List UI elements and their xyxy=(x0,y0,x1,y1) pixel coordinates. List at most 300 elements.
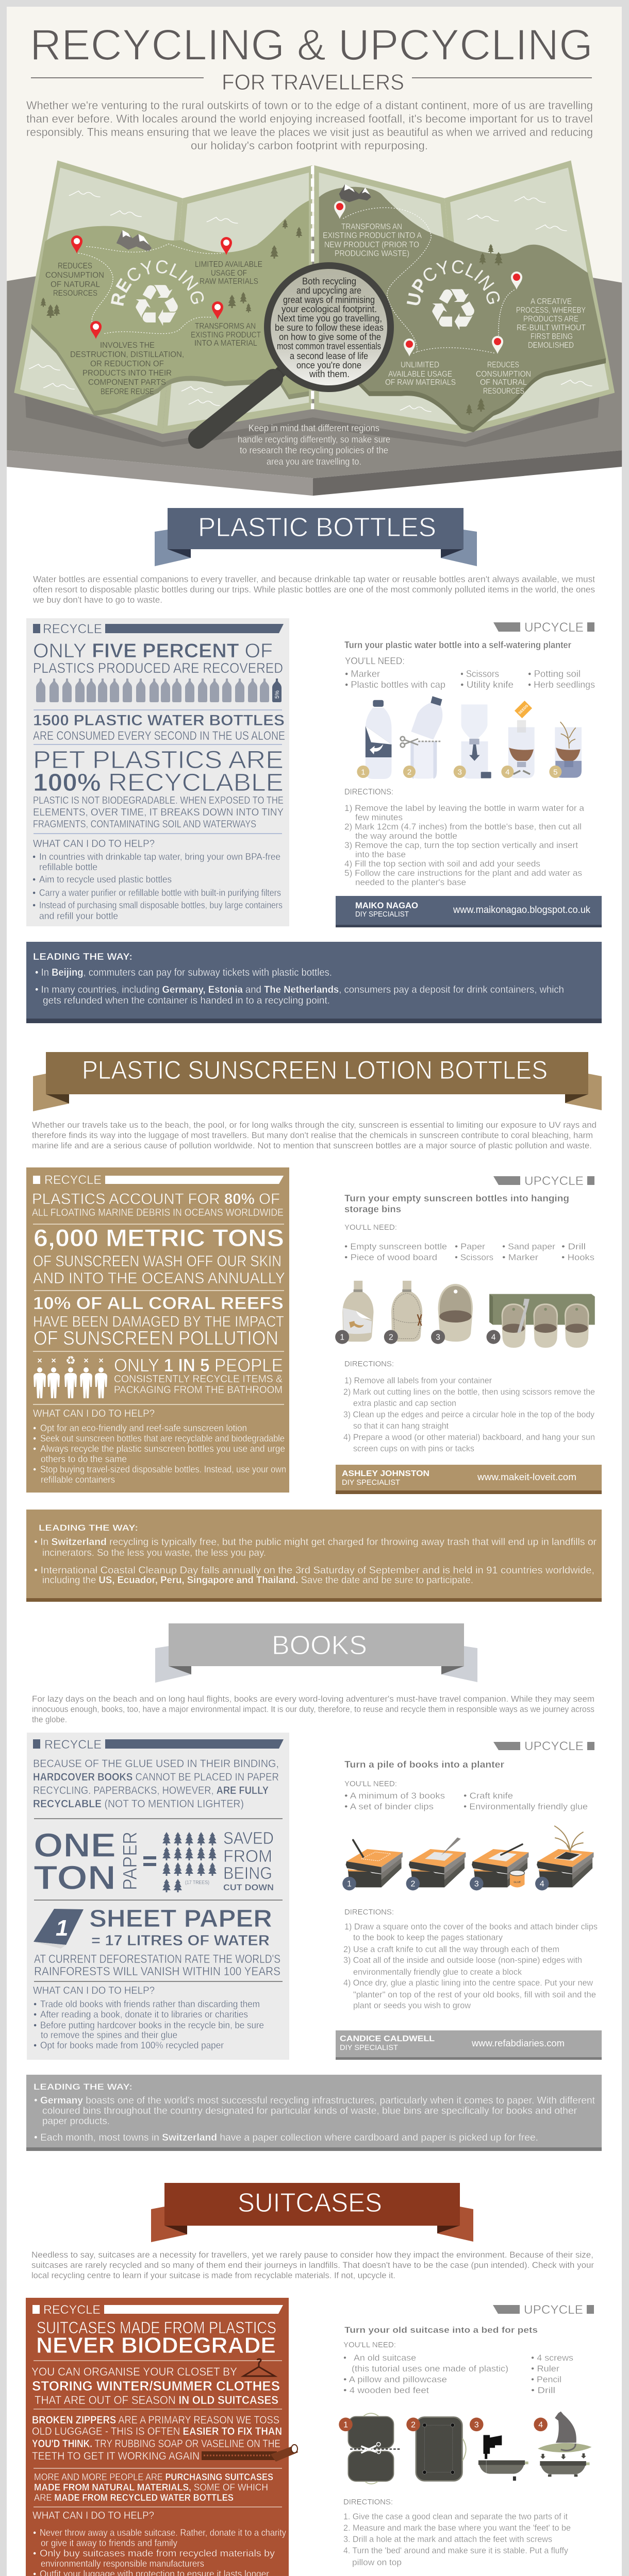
note on table: Keep in mind that different regions xyxy=(249,423,379,433)
materials: • A set of binder clips xyxy=(344,1802,434,1811)
directions: 4. Turn the 'bed' around and make sure it is stable. Put a fluffy xyxy=(343,2546,568,2555)
what can I do: WHAT CAN I DO TO HELP? xyxy=(33,1985,155,1996)
what can I do: • xyxy=(33,1464,36,1475)
icon: upcycling emblem: ♻ xyxy=(427,277,479,344)
map labels: upcycling: AVAILABLE USAGE xyxy=(388,370,452,379)
suitcases intro: Needless to say, suitcases are a necessity for travellers, yet we rarely pause to consider how they impact the environment. Because of their size, xyxy=(31,2250,593,2260)
stat: one in five: ONLY 1 IN 5 PEOPLE xyxy=(114,1355,283,1376)
suitcases intro xyxy=(31,2250,594,2280)
what can I do: to remove the spines and their glue xyxy=(41,2030,177,2040)
what can I do: • xyxy=(32,900,36,910)
storing clothes text xyxy=(31,2359,280,2406)
icon: recycling emblem: RECYCLING xyxy=(110,260,204,306)
steps illustration: suitcase pet bed: 3 xyxy=(474,2420,479,2429)
directions: 2) Mark 12cm (4.7 inches) from the bottle's base, then cut all xyxy=(344,822,582,832)
stat: never biodegrade: NEVER BIODEGRADE xyxy=(36,2333,276,2358)
map pins: recycling xyxy=(71,235,232,339)
recycle header: RECYCLE xyxy=(44,1738,102,1752)
upcycle header: UPCYCLE xyxy=(524,1739,584,1753)
map labels: recycling: BEFORE REUSE xyxy=(101,387,154,396)
map labels: recycling: RESOURCES xyxy=(53,289,97,298)
materials: • A pillow and pillowcase xyxy=(343,2375,447,2384)
recycle header xyxy=(33,1738,284,1752)
steps illustration: book planter: 4 xyxy=(540,1880,544,1889)
stat: five percent xyxy=(33,640,283,676)
directions: 4) Fill the top section with soil and add your seeds xyxy=(344,859,540,869)
stat: PET plastics: FRAGMENTS, CONTAMINATING SOIL AND WATERWAYS xyxy=(33,819,256,830)
what can I do: In countries with drinkable tap water, bring your own BPA-free xyxy=(39,852,280,862)
directions: 2. Measure and mark the base where you want the 'feet' to be xyxy=(343,2523,571,2533)
map labels: upcycling: RESOURCES xyxy=(483,387,524,396)
intro text: than ever before. With locales around the world enjoying increased footfall, it's become important for us to travel xyxy=(26,112,593,125)
what can I do: • xyxy=(34,2040,37,2050)
what can I do: refillable containers xyxy=(41,1475,115,1485)
stat: one in five: CONSISTENTLY RECYCLE ITEMS & xyxy=(114,1374,283,1385)
materials: • Pencil xyxy=(531,2375,561,2384)
what can I do: WHAT CAN I DO TO HELP? xyxy=(32,2510,154,2521)
materials: • Craft knife xyxy=(464,1791,513,1801)
stat: metric tons: 6,000 METRIC TONS xyxy=(34,1224,284,1251)
map labels: recycling: USAGE OF xyxy=(211,269,247,278)
leading the way: sunscreen: • In Switzerland recycling is typically free, but the public might get charged for throwing away trash that will end up in landfills or xyxy=(34,1537,597,1548)
leading the way: books: LEADING THE WAY: xyxy=(34,2082,133,2092)
stat: one ton of paper: BEING xyxy=(223,1863,272,1883)
what can I do: Opt for books made from 100% recycled paper xyxy=(40,2040,224,2050)
credit: Candice Caldwell: CANDICE CALDWELL xyxy=(340,2035,435,2043)
credit: Ashley Johnston: ASHLEY JOHNSTON xyxy=(342,1469,429,1478)
map labels: upcycling: A CREATIVE xyxy=(531,297,572,306)
stat: metric tons: AND INTO THE OCEANS ANNUALLY xyxy=(33,1269,285,1287)
hardcover text xyxy=(33,1758,279,1810)
banner: suitcases: SUITCASES xyxy=(238,2188,382,2218)
steps illustration: sunscreen storage xyxy=(335,1281,595,1348)
map labels: upcycling xyxy=(323,223,586,396)
zipper text: BROKEN ZIPPERS ARE A PRIMARY REASON WE TOSS xyxy=(32,2414,279,2426)
upcycle header: UPCYCLE xyxy=(524,620,584,635)
intro text: responsibly. This means ensuring that we leave the places we visit just as beautiful as when we arrived and reducing xyxy=(26,126,593,139)
hardcover text: BECAUSE OF THE GLUE USED IN THEIR BINDING, xyxy=(33,1758,279,1770)
sunscreen intro: marine life and are a serious cause of pollution worldwide. Not to mention that sunscreen bottles are a major source of plastic pollution and waste. xyxy=(32,1141,592,1150)
storing clothes text: STORING WINTER/SUMMER CLOTHES xyxy=(32,2378,280,2394)
stat: 1500 bottles xyxy=(33,712,285,743)
steps illustration: suitcase pet bed xyxy=(339,2412,592,2484)
materials: YOU'LL NEED: xyxy=(344,1780,397,1788)
what can I do: • xyxy=(34,2020,37,2030)
title: RECYCLING & UPCYCLING xyxy=(30,21,593,69)
what can I do: • xyxy=(33,2528,36,2538)
directions: 3. Drill a hole at the mark and attach the feet with screws xyxy=(343,2534,552,2544)
credit: Ashley Johnston xyxy=(336,1465,602,1494)
directions: to the book to keep the pages stationary xyxy=(353,1933,503,1942)
map labels: recycling xyxy=(45,260,262,396)
icon: people row: × xyxy=(98,1357,104,1365)
note on table: area you are travelling to. xyxy=(267,456,361,467)
materials xyxy=(344,1759,588,1811)
stat: PET plastics: PLASTIC IS NOT BIODEGRADABLE. WHEN EXPOSED TO THE xyxy=(33,795,284,806)
upcycle header: UPCYCLE xyxy=(524,1174,584,1188)
materials: • Marker xyxy=(345,669,380,679)
stat: one sheet of paper: SHEET PAPER xyxy=(89,1905,272,1933)
note on table: to research the recycling policies of the xyxy=(240,445,388,455)
leading the way: sunscreen: including the US, Ecuador, Peru, Singapore and Thailand. Save the date and be sure to participate. xyxy=(42,1575,473,1586)
steps illustration: bottle planter: 1 xyxy=(361,768,366,776)
stat: one sheet of paper xyxy=(34,1905,280,1978)
what can I do: • xyxy=(33,2548,36,2558)
icon: people row: × xyxy=(37,1357,42,1365)
map pins: upcycling xyxy=(334,201,522,357)
what can I do: • xyxy=(33,1433,36,1444)
magnifier text: great ways of minimising xyxy=(283,295,375,305)
recycle header xyxy=(33,622,284,636)
natural materials text: ARE MADE FROM RECYCLED WATER BOTTLES xyxy=(34,2493,234,2503)
stat: marine debris: ALL FLOATING MARINE DEBRIS IN OCEANS WORLDWIDE xyxy=(32,1207,284,1218)
materials: YOU'LL NEED: xyxy=(343,2341,396,2349)
what can I do: After reading a book, donate it to libraries or charities xyxy=(40,2009,248,2020)
stat: one ton of paper: SAVED xyxy=(223,1828,274,1848)
map labels: recycling: CONSUMPTION xyxy=(45,271,104,280)
intro text xyxy=(26,99,593,152)
intro text: Whether we're venturing to the rural outskirts of town or to the edge of a distant continent, more of us are travelling xyxy=(26,99,593,112)
magnifier text xyxy=(275,276,384,379)
directions: "planter" on top of the rest of your old books, fill with soil and the xyxy=(353,1990,596,1999)
stat: 1500 bottles: 1500 PLASTIC WATER BOTTLES xyxy=(33,712,285,729)
steps illustration: sunscreen storage: 1 xyxy=(340,1333,344,1342)
leading the way: plastic bottles: LEADING THE WAY: xyxy=(33,952,133,962)
stat: metric tons xyxy=(33,1224,285,1287)
magnifier text: on how to give some of the xyxy=(279,332,381,342)
directions: 1) Remove all labels from your container xyxy=(344,1376,492,1385)
what can I do: Carry a water purifier or refillable bottle with built-in purifying filters xyxy=(39,888,281,898)
directions: DIRECTIONS: xyxy=(344,1908,394,1917)
what can I do: and refill your bottle xyxy=(39,911,118,921)
stat: one sheet of paper: AT CURRENT DEFORESTATION RATE THE WORLD'S xyxy=(34,1952,280,1965)
stat: 1500 bottles: ARE CONSUMED EVERY SECOND IN THE US ALONE xyxy=(33,729,285,743)
what can I do: Never throw away a usable suitcase. Rather, donate it to a charity xyxy=(40,2528,286,2538)
what can I do xyxy=(33,1408,286,1485)
banner: sunscreen xyxy=(33,1052,602,1111)
hardcover text: HARDCOVER BOOKS CANNOT BE PLACED IN PAPER xyxy=(33,1771,279,1783)
directions: screen cups on with pins or tacks xyxy=(353,1444,474,1453)
icon: recycling emblem xyxy=(110,260,204,340)
note on table xyxy=(238,423,390,467)
what can I do: Instead of purchasing small disposable bottles, buy large containers xyxy=(39,900,283,910)
map labels: recycling: REDUCES xyxy=(58,262,92,270)
directions: 4) Prepare a wood (or other material) backboard, and hang your sun xyxy=(343,1432,595,1442)
stat: one ton of paper: ONE xyxy=(34,1826,116,1864)
directions: 1) Remove the label by leaving the bottle in warm water for a xyxy=(344,803,585,813)
materials: • Utility knife xyxy=(460,680,514,690)
materials: Turn a pile of books into a planter xyxy=(344,1759,504,1770)
steps illustration: suitcase pet bed: 2 xyxy=(411,2420,416,2429)
icon: upcycling emblem xyxy=(406,260,500,344)
leading the way: books: • Germany boasts one of the world's most successful recycling infrastructures, particularly when it comes to paper. With different xyxy=(34,2095,595,2106)
upcycle header xyxy=(493,2303,594,2317)
what can I do: • xyxy=(34,1999,37,2009)
materials: • Piece of wood board xyxy=(344,1252,437,1262)
materials xyxy=(344,640,595,690)
directions: plant or seeds you wish to grow xyxy=(353,2001,471,2010)
books intro xyxy=(32,1694,594,1724)
stat: one ton of paper: FROM xyxy=(223,1846,272,1866)
directions: 2) Use a craft knife to cut all the way through each of them xyxy=(343,1944,559,1954)
directions: needed to the planter's base xyxy=(355,877,466,887)
table under the map xyxy=(7,230,622,496)
what can I do xyxy=(32,838,283,921)
materials: • 4 wooden bed feet xyxy=(343,2385,429,2395)
steps illustration: sunscreen storage: 2 xyxy=(389,1333,393,1342)
stat: coral reefs: 10% OF ALL CORAL REEFS xyxy=(33,1294,284,1313)
storing clothes text: THAT ARE OUT OF SEASON IN OLD SUITCASES xyxy=(35,2394,278,2406)
banner: sunscreen: PLASTIC SUNSCREEN LOTION BOTTLES xyxy=(82,1056,548,1084)
materials: • Paper xyxy=(455,1242,485,1251)
stat: coral reefs: OF SUNSCREEN POLLUTION xyxy=(34,1328,278,1349)
what can I do: Aim to recycle used plastic bottles xyxy=(39,874,172,885)
materials: Turn your plastic water bottle into a self-watering planter xyxy=(344,640,571,650)
what can I do: others to do the same xyxy=(41,1454,127,1464)
leading the way: sunscreen: LEADING THE WAY: xyxy=(39,1523,138,1533)
materials: • Marker xyxy=(502,1252,538,1262)
map labels: recycling: EXISTING PRODUCT xyxy=(191,331,261,340)
stat: five percent: ONLY FIVE PERCENT OF xyxy=(33,640,273,662)
magnifier text: be sure to follow these ideas xyxy=(275,323,384,333)
stat: coral reefs: HAVE BEEN DAMAGED BY THE IMPACT xyxy=(33,1313,284,1330)
stat: never biodegrade: SUITCASES MADE FROM PLASTICS xyxy=(37,2318,276,2337)
panel: upcycle suitcases xyxy=(335,2303,601,2576)
sunscreen intro: Whether our travels take us to the beach, the pool, or for long walks through the city, sunscreen is essential to limiting our exposure to UV rays and xyxy=(32,1121,597,1130)
leading the way: plastic bottles: gets refunded when the container is handed in to a recycling point. xyxy=(43,995,330,1006)
credit: Maiko Nagao: MAIKO NAGAO xyxy=(355,901,418,910)
directions: 3) Clean up the edges and peirce a circular hole in the top of the body xyxy=(343,1410,594,1419)
leading the way: sunscreen xyxy=(26,1510,602,1602)
stat: metric tons: OF SUNSCREEN WASH OFF OUR SKIN xyxy=(33,1252,282,1270)
materials: • Scissors xyxy=(460,669,499,679)
books intro: For lazy days on the beach and on long haul flights, books are every word-loving adventurer's must-have travel companion. While they may seem xyxy=(32,1694,594,1704)
stat: one ton of paper: (17 TREES) xyxy=(185,1880,209,1886)
stat: five percent: PLASTICS PRODUCED ARE RECOVERED xyxy=(33,660,283,676)
steps illustration: suitcase pet bed: 1 xyxy=(343,2420,348,2429)
what can I do: WHAT CAN I DO TO HELP? xyxy=(33,1408,155,1419)
directions: DIRECTIONS: xyxy=(343,2498,393,2506)
materials: • Environmentally friendly glue xyxy=(464,1802,588,1811)
zipper text: TEETH TO GET IT WORKING AGAIN xyxy=(32,2450,200,2462)
materials: • Drill xyxy=(531,2385,555,2395)
directions xyxy=(344,788,585,887)
upcycle header xyxy=(493,1739,594,1753)
steps illustration: book planter: 3 xyxy=(474,1880,479,1889)
steps illustration: book planter: GLUE xyxy=(514,1880,521,1884)
stat: PET plastics: 100% RECYCLABLE xyxy=(33,769,284,796)
stat: marine debris xyxy=(32,1191,284,1218)
magnifier text: a second lease of life xyxy=(290,351,368,361)
what can I do: • xyxy=(32,888,36,898)
directions: few minutes xyxy=(355,812,403,822)
directions: so that it can hang straight xyxy=(353,1421,449,1431)
plastic bottles intro: we buy don't have to go to waste. xyxy=(32,595,162,605)
leading the way: plastic bottles: • In Beijing, commuters can pay for subway tickets with plastic bottles. xyxy=(35,967,332,978)
stat: one sheet of paper: RAINFORESTS WILL VANISH WITHIN 100 YEARS xyxy=(34,1964,280,1978)
map labels: upcycling: PRODUCING WASTE) xyxy=(335,249,409,258)
books intro: the globe. xyxy=(32,1715,67,1724)
map labels: recycling: LIMITED AVAILABLE xyxy=(195,260,262,269)
what can I do: Always recycle the plastic sunscreen bottles you use and urge xyxy=(40,1444,285,1454)
credit: Candice Caldwell xyxy=(336,2030,602,2060)
recycle header: RECYCLE xyxy=(43,2303,101,2317)
directions xyxy=(343,1360,595,1453)
natural materials text xyxy=(34,2472,273,2503)
what can I do: • xyxy=(33,1423,36,1433)
stat: PET plastics: PET PLASTICS ARE xyxy=(33,747,284,774)
materials: • Empty sunscreen bottle xyxy=(344,1242,447,1251)
directions: DIRECTIONS: xyxy=(344,788,393,796)
materials: YOU'LL NEED: xyxy=(345,656,405,666)
stat: one ton of paper: PAPER xyxy=(120,1832,141,1890)
steps illustration: bottle planter: 2 xyxy=(407,768,411,776)
what can I do: environmentally responsible manufacturers xyxy=(41,2558,204,2569)
natural materials text: MADE FROM NATURAL MATERIALS, SOME OF WHICH xyxy=(34,2482,268,2493)
steps illustration: book planter: 1 xyxy=(347,1880,352,1889)
materials: • Potting soil xyxy=(528,669,581,679)
what can I do xyxy=(33,1985,264,2050)
magnifier text: with them. xyxy=(309,369,350,379)
recycle header xyxy=(32,2303,283,2317)
banner: plastic bottles xyxy=(155,508,477,566)
steps illustration: sunscreen storage: 4 xyxy=(491,1333,496,1342)
map labels: upcycling: PRODUCTS ARE xyxy=(523,315,578,324)
upcycle header xyxy=(493,620,594,635)
panel: upcycle plastic bottles xyxy=(336,620,602,927)
map labels: upcycling: NEW PRODUCT (PRIOR TO xyxy=(324,241,419,249)
suitcases intro: local recycling centre to learn if your suitcase is made from recyclable materials. If not, upcycle it. xyxy=(31,2271,395,2280)
directions: 3) Coat all of the inside and outside loose (non-spine) edges with xyxy=(343,1955,582,1965)
map labels: recycling: COMPONENT PARTS xyxy=(88,378,166,387)
map labels: recycling: DESTRUCTION, DISTILLATION, xyxy=(70,350,184,359)
materials: (this tutorial uses one made of plastic) xyxy=(352,2364,508,2374)
banner: books xyxy=(155,1623,477,1683)
steps illustration: book planter xyxy=(342,1826,593,1890)
stat: one in five: PACKAGING FROM THE BATHROOM xyxy=(114,1384,283,1396)
zipper text: YOU'D THINK. TRY RUBBING SOAP OR VASELINE ON THE xyxy=(32,2438,280,2450)
hardcover text: RECYCLING. PAPERBACKS, HOWEVER, ARE FULLY xyxy=(33,1785,269,1797)
map labels: recycling: INTO A MATERIAL xyxy=(194,339,257,348)
stat: one sheet of paper: 1 xyxy=(56,1916,68,1941)
materials: Turn your old suitcase into a bed for pets xyxy=(344,2325,538,2335)
credit: Ashley Johnston: DIY SPECIALIST xyxy=(342,1478,400,1487)
icon: people row xyxy=(34,1354,107,1398)
map labels: upcycling: FIRST BEING xyxy=(531,332,573,341)
note on table: handle recycling differently, so make sure xyxy=(238,434,390,445)
map labels: recycling: PRODUCTS INTO THEIR xyxy=(82,369,172,378)
icon: trees xyxy=(162,1832,217,1892)
credit: Maiko Nagao: DIY SPECIALIST xyxy=(355,910,409,919)
map labels: upcycling: CONSUMPTION xyxy=(476,370,531,379)
map labels: upcycling: UNLIMITED xyxy=(401,361,439,369)
materials: storage bins xyxy=(344,1204,401,1214)
steps illustration: bottle planter: 3 xyxy=(458,768,462,776)
what can I do: Trade old books with friends rather than discarding them xyxy=(40,1999,260,2009)
plastic bottles intro: often resort to disposable plastic bottles during our trips. While plastic bottles are one of the most commonly polluted items in the world, the ones xyxy=(33,584,595,595)
directions: 5) Follow the care instructions for the plant and add water as xyxy=(344,868,582,878)
panel: recycle books xyxy=(27,1733,289,2060)
magnifier text: once you're done xyxy=(296,360,361,370)
map labels: upcycling: PROCESS, WHEREBY xyxy=(516,306,586,315)
zipper text xyxy=(32,2414,298,2462)
directions: 2) Mark out cutting lines on the bottle, then using scissors remove the xyxy=(343,1387,595,1397)
magnifying glass xyxy=(198,262,394,439)
leading the way: books: coloured bins throughout the country designated for particular kinds of waste, blue bins are specifically for books and other xyxy=(42,2106,577,2116)
icon: zipper xyxy=(202,2445,298,2462)
stat: PET plastics: ELEMENTS, OVER TIME, IT BREAKS DOWN INTO TINY xyxy=(33,807,284,818)
sunscreen intro: therefore finds its way into the luggage of most travellers. But many don't realise that the chemicals in sunscreen contribute to coral bleaching, harm xyxy=(32,1131,593,1140)
stat: one ton of paper: TON xyxy=(34,1858,116,1896)
suitcases intro: suitcases are rarely recycled and so many of them end their journeys in landfills. That doesn't have to be the case (pun intended). Check with your xyxy=(31,2261,594,2270)
magnifier text: most common travel essentials xyxy=(277,341,381,351)
sunscreen intro xyxy=(32,1121,597,1150)
leading the way: sunscreen: • International Coastal Cleanup Day falls annually on the 3rd Saturday of September and is held in 91 countries worldwide, xyxy=(34,1565,594,1576)
what can I do: Before putting hardcover books in the recycle bin, be sure xyxy=(40,2020,264,2030)
directions: DIRECTIONS: xyxy=(344,1360,394,1368)
steps illustration: bottle planter: SEEDS xyxy=(518,704,529,715)
bottle row: 5% xyxy=(274,690,280,699)
steps illustration: bottle planter: 4 xyxy=(505,768,510,776)
directions: the way around the bottle xyxy=(355,831,457,841)
directions: 3) Remove the cap, turn the top section vertically and insert xyxy=(344,840,578,850)
stat: one sheet of paper: = 17 LITRES OF WATER xyxy=(91,1933,270,1949)
what can I do xyxy=(32,2510,286,2576)
materials: • A minimum of 3 books xyxy=(344,1791,445,1801)
map labels: recycling: RAW MATERIALS xyxy=(200,277,258,286)
what can I do: • xyxy=(32,852,36,862)
materials: An old suitcase xyxy=(354,2353,416,2363)
directions: into the base xyxy=(355,850,406,859)
directions: 1. Give the case a good clean and separate the two parts of it xyxy=(343,2512,568,2521)
subtitle: FOR TRAVELLERS xyxy=(222,70,404,95)
stat: one in five xyxy=(114,1355,283,1396)
banner: books: BOOKS xyxy=(272,1631,367,1660)
map labels: upcycling: TRANSFORMS AN xyxy=(341,223,402,231)
banner: plastic bottles: PLASTIC BOTTLES xyxy=(198,513,436,543)
icon: recycling emblem: ♻ xyxy=(131,273,183,340)
icon: people row: × xyxy=(51,1357,56,1365)
credit: Candice Caldwell: www.refabdiaries.com xyxy=(471,2038,565,2048)
intro text: our holiday's carbon footprint with repurposing. xyxy=(191,139,428,152)
materials: YOU'LL NEED: xyxy=(344,1223,397,1232)
panel: upcycle sunscreen xyxy=(335,1174,602,1494)
hardcover text: RECYCLABLE (NOT TO MENTION LIGHTER) xyxy=(33,1798,244,1810)
magnifier text: Both recycling xyxy=(302,276,356,286)
leading the way: books xyxy=(26,2075,602,2151)
steps illustration: suitcase pet bed: 4 xyxy=(538,2420,543,2429)
what can I do: • xyxy=(33,1444,36,1454)
panel: upcycle books xyxy=(336,1739,602,2060)
materials: • Ruler xyxy=(531,2364,559,2374)
magnifier text: Next time you go travelling, xyxy=(277,313,382,324)
materials: • Scissors xyxy=(455,1252,493,1262)
what can I do: WHAT CAN I DO TO HELP? xyxy=(33,838,155,850)
plastic bottles intro: Water bottles are essential companions to every traveller, and because drinkable tap water or reusable bottles aren't always available, we must xyxy=(33,574,595,584)
directions xyxy=(343,1908,598,2010)
panel: recycle plastic bottles xyxy=(26,618,289,926)
materials: • 4 screws xyxy=(531,2353,573,2363)
directions: pillow on top xyxy=(352,2557,402,2567)
stat: one ton of paper: CUT DOWN xyxy=(223,1883,274,1892)
leading the way: sunscreen: incinerators. So the less you waste, the less you pay. xyxy=(42,1548,266,1558)
materials: • Sand paper xyxy=(502,1242,555,1251)
materials: • xyxy=(343,2353,346,2363)
materials xyxy=(343,2325,573,2395)
recycle header: RECYCLE xyxy=(44,1173,102,1187)
map illustration xyxy=(14,160,615,434)
directions: 1) Draw a square onto the cover of the books and attach binder clips xyxy=(344,1922,598,1931)
